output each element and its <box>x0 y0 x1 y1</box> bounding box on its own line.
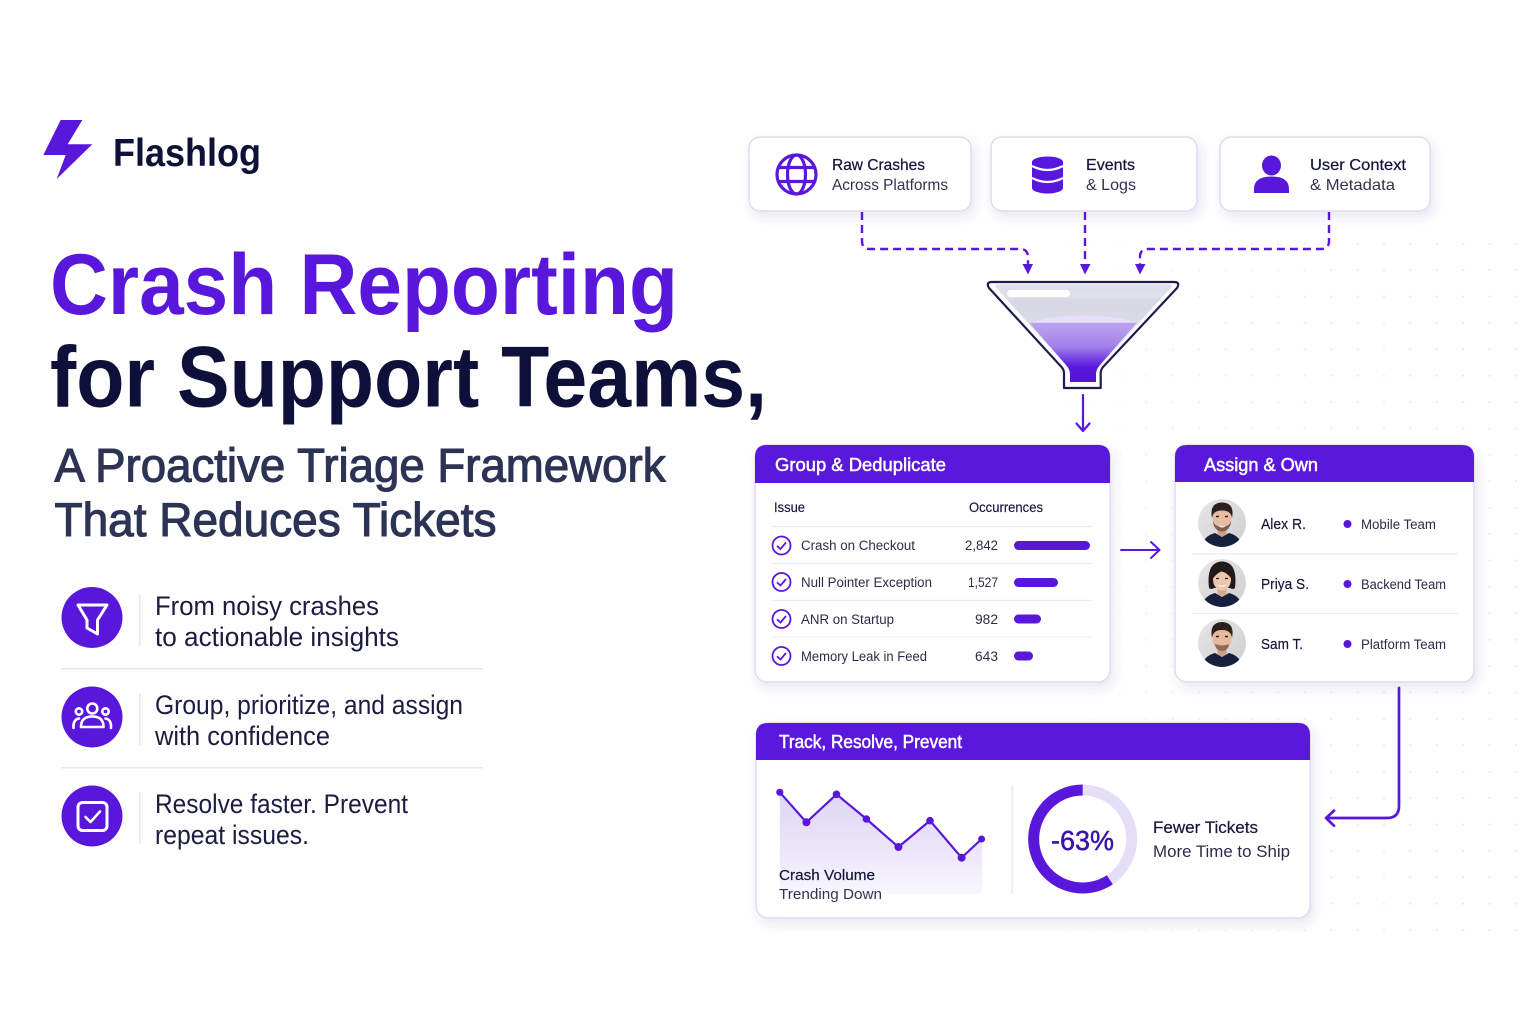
panel: assign and own <box>1175 445 1474 682</box>
subtitle: That Reduces Tickets <box>54 493 496 546</box>
benefit: noisy crashes to insights <box>62 587 399 652</box>
subtitle: A Proactive Triage Framework <box>54 438 666 492</box>
row: Sam T. <box>1198 619 1446 669</box>
row: crash on checkout: 2,842 <box>965 538 998 553</box>
source card: raw crashes: Raw Crashes <box>832 157 925 174</box>
row: Priya S. <box>1198 559 1446 609</box>
title <box>50 237 767 426</box>
source card: events and logs <box>991 137 1197 211</box>
benefit: resolve faster <box>62 786 408 850</box>
icon: person <box>1254 156 1289 193</box>
chart label: Trending Down <box>779 886 882 903</box>
donut caption: Fewer Tickets <box>1153 818 1258 837</box>
brand name: Flashlog <box>113 132 261 175</box>
row: crash on checkout <box>772 536 1090 554</box>
dashed arrow: user context to funnel <box>1135 212 1329 274</box>
icon: globe <box>777 155 816 194</box>
panel: track, resolve, prevent <box>756 723 1310 918</box>
source card: user context: & Metadata <box>1310 177 1395 194</box>
title: Crash Reporting <box>50 237 678 333</box>
row: memory leak in feed <box>772 647 1033 665</box>
donut caption: More Time to Ship <box>1153 842 1290 861</box>
dashed arrow: events to funnel <box>1080 212 1090 274</box>
icon: lightning bolt <box>43 120 92 179</box>
benefit: group, prioritize, assign <box>62 686 463 751</box>
benefit: noisy crashes to insights: to actionable insights <box>155 622 399 652</box>
benefit: noisy crashes to insights: From noisy crashes <box>155 591 379 621</box>
row: Alex R.: Alex R. <box>1261 517 1306 533</box>
row: Sam T.: Platform Team <box>1361 637 1446 652</box>
funnel <box>988 282 1178 388</box>
source card: raw crashes <box>749 137 971 211</box>
source card: events and logs: Events <box>1086 157 1135 174</box>
row: Alex R. <box>1198 499 1436 549</box>
row: memory leak in feed: Memory Leak in Feed <box>801 649 927 664</box>
panel heading: Group & Deduplicate <box>775 455 946 475</box>
table header <box>774 500 1043 515</box>
icon: database <box>1032 156 1063 194</box>
panel: group and deduplicate <box>755 445 1110 682</box>
subtitle <box>54 438 666 546</box>
row: anr on startup <box>772 610 1041 628</box>
row: anr on startup: ANR on Startup <box>801 612 894 627</box>
arrow: assign to track <box>1326 688 1399 826</box>
row: null pointer exception <box>772 573 1058 591</box>
chart label: Crash Volume <box>779 867 875 884</box>
row: anr on startup: 982 <box>975 612 998 627</box>
benefit: resolve faster: repeat issues. <box>155 820 309 850</box>
line chart: crash volume <box>776 789 985 894</box>
logo: Flashlog <box>43 120 261 179</box>
donut chart: -63%: -63% <box>1051 825 1114 856</box>
benefit: resolve faster: Resolve faster. Prevent <box>155 789 408 819</box>
row: crash on checkout: Crash on Checkout <box>801 538 915 553</box>
row: null pointer exception: 1,527 <box>968 575 998 590</box>
table header: Occurrences <box>969 500 1043 515</box>
row: Priya S.: Backend Team <box>1361 577 1446 592</box>
donut chart: -63% <box>1034 790 1132 888</box>
row: Alex R.: Mobile Team <box>1361 517 1436 532</box>
panel heading: Assign & Own <box>1204 455 1318 475</box>
chart label <box>779 867 882 903</box>
donut caption <box>1153 818 1290 861</box>
row: Priya S.: Priya S. <box>1261 577 1309 593</box>
title: for Support Teams, <box>50 330 767 426</box>
benefit: group, prioritize, assign: with confidence <box>154 721 330 751</box>
table header: Issue <box>774 500 805 515</box>
arrow: funnel to group card <box>1076 395 1090 431</box>
source card: user context <box>1220 137 1430 211</box>
arrow: group to assign <box>1121 542 1160 558</box>
row: null pointer exception: Null Pointer Exception <box>801 575 932 590</box>
benefit: group, prioritize, assign: Group, prioritize, and assign <box>155 690 463 720</box>
dashed arrow: raw crashes to funnel <box>862 212 1033 274</box>
source card: raw crashes: Across Platforms <box>832 177 948 194</box>
panel heading: Track, Resolve, Prevent <box>779 732 962 752</box>
row: Sam T.: Sam T. <box>1261 637 1303 653</box>
source card: user context: User Context <box>1310 157 1407 174</box>
row: memory leak in feed: 643 <box>975 649 998 664</box>
source card: events and logs: & Logs <box>1086 177 1136 194</box>
